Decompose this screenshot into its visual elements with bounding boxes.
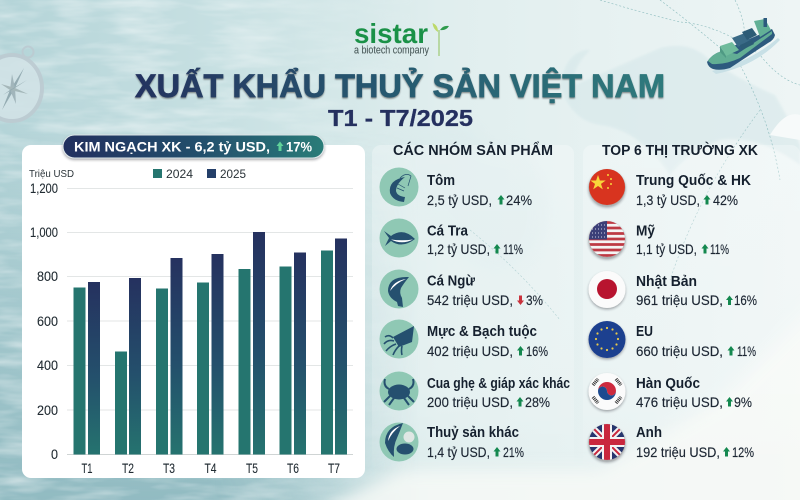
item: tuna: 3% [526, 292, 543, 308]
item: squid and octopus: 16% [526, 343, 548, 359]
item: China and Hong Kong: 1,3 tỷ USD, [636, 192, 700, 208]
chart legend: 2025 [220, 167, 246, 181]
item: tuna: Cá Ngừ [427, 274, 475, 290]
bar chart: 600 [37, 313, 58, 329]
item: China and Hong Kong [588, 169, 751, 208]
item: United Kingdom: 192 triệu USD, [636, 444, 720, 460]
panel: export value chart [22, 135, 365, 478]
item: squid and octopus [380, 320, 548, 359]
item: other seafood: 21% [503, 444, 524, 460]
item: Japan: 16% [734, 292, 757, 308]
item: United Kingdom: Anh [636, 425, 662, 441]
item: other seafood: 1,4 tỷ USD, [427, 444, 490, 460]
unit label: Triệu USD [29, 168, 74, 180]
item: United States [588, 221, 729, 258]
item: crab and crustaceans: Cua ghẹ & giáp xác khác [427, 376, 570, 392]
bar chart [30, 180, 353, 476]
item: European Union: 660 triệu USD, [636, 343, 723, 359]
item: crab and crustaceans [380, 372, 570, 410]
panel: top 6 markets [583, 141, 800, 475]
item: European Union: EU [636, 324, 653, 340]
item: South Korea: 9% [734, 394, 752, 410]
bar chart: 0 [51, 446, 58, 462]
item: squid and octopus: 402 triệu USD, [427, 343, 513, 359]
panel: product groups [372, 141, 574, 475]
title: XUẤT KHẨU THUỶ SẢN VIỆT NAM [135, 68, 665, 104]
bar chart: T7 [328, 460, 340, 476]
bar chart: T3 [163, 460, 175, 476]
bar chart: 1,000 [30, 224, 58, 240]
item: squid and octopus: Mực & Bạch tuộc [427, 324, 537, 340]
item: South Korea: Hàn Quốc [636, 376, 700, 392]
item: crab and crustaceans: 200 triệu USD, [427, 394, 513, 410]
item: shrimp: 2,5 tỷ USD, [427, 192, 492, 208]
logo: sistar [354, 18, 449, 56]
pill heading: total export value: 17% [286, 138, 313, 154]
item: United States: 11% [710, 241, 729, 257]
pill heading: total export value: KIM NGẠCH XK - 6,2 tỷ USD, [74, 138, 270, 154]
logo: sistar: a biotech company [354, 44, 429, 56]
chart legend: 2024 [166, 167, 193, 181]
chart legend [153, 167, 246, 181]
item: Japan: Nhật Bản [636, 274, 697, 290]
item: China and Hong Kong: 42% [713, 192, 738, 208]
pill heading: total export value [63, 135, 324, 158]
item: tuna [380, 270, 543, 308]
bar chart: 1,200 [30, 180, 58, 196]
item: Japan: 961 triệu USD, [636, 292, 723, 308]
item: shrimp [380, 168, 532, 208]
item: crab and crustaceans: 28% [525, 394, 550, 410]
icon: container ship [707, 18, 780, 74]
item: tuna: 542 triệu USD, [427, 292, 513, 308]
item: European Union [588, 321, 756, 359]
bar chart: 800 [37, 268, 58, 284]
item: pangasius: Cá Tra [427, 224, 469, 240]
item: European Union: 11% [737, 343, 756, 359]
item: United Kingdom [588, 424, 754, 461]
bar chart: 400 [37, 357, 58, 373]
item: shrimp: Tôm [427, 173, 455, 189]
item: United Kingdom: 12% [732, 444, 754, 460]
bar chart: 200 [37, 402, 58, 418]
item: other seafood: Thuỷ sản khác [427, 425, 519, 441]
subtitle: period: T1 - T7/2025 [328, 105, 473, 131]
item: South Korea [588, 373, 752, 410]
item: shrimp: 24% [506, 192, 532, 208]
heading: product groups: CÁC NHÓM SẢN PHẨM [393, 141, 553, 159]
heading: top markets: TOP 6 THỊ TRƯỜNG XK [602, 141, 758, 159]
bar chart: T4 [204, 460, 217, 476]
item: pangasius: 11% [503, 241, 523, 257]
item: United States: Mỹ [636, 224, 655, 240]
item: Japan [588, 271, 757, 308]
item: South Korea: 476 triệu USD, [636, 394, 723, 410]
icon: compass [0, 46, 42, 121]
bar chart: T6 [287, 460, 299, 476]
bar chart: T5 [246, 460, 258, 476]
item: China and Hong Kong: Trung Quốc & HK [636, 173, 751, 189]
item: pangasius [380, 218, 523, 258]
item: pangasius: 1,2 tỷ USD, [427, 241, 490, 257]
item: United States: 1,1 tỷ USD, [636, 241, 697, 257]
bar chart: T2 [122, 460, 134, 476]
logo: sistar: sistar [354, 18, 428, 49]
item: other seafood [380, 422, 524, 462]
bar chart: T1 [82, 460, 93, 476]
